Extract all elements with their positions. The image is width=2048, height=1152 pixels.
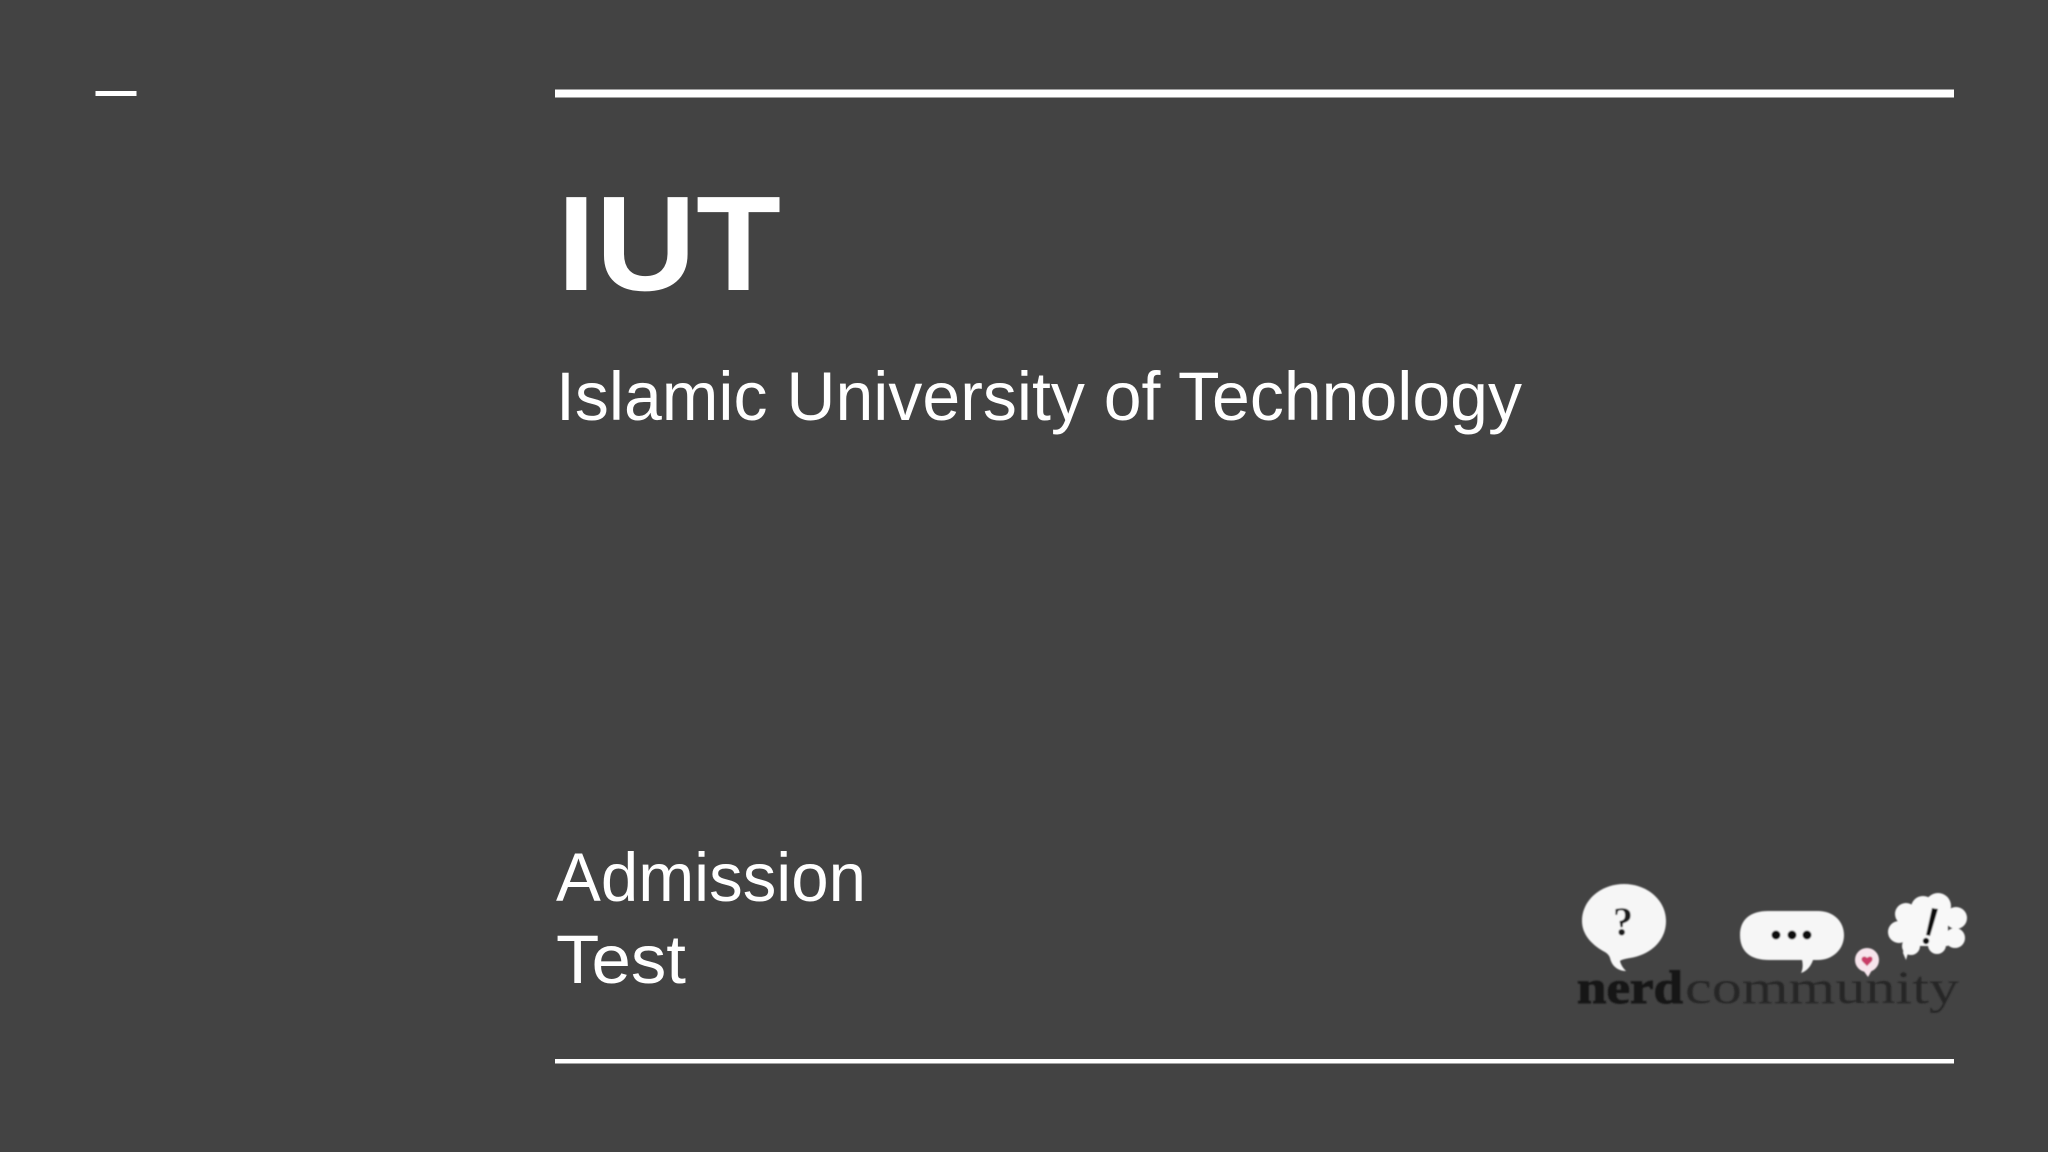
logo wordmark: community [1685, 962, 1960, 1014]
admission test label [556, 839, 866, 998]
subtitle: Islamic University of Technology [556, 358, 1522, 435]
logo: nerdcommunity [1577, 884, 1967, 1014]
bottom rule [555, 1059, 1954, 1064]
title: IUT [557, 168, 781, 319]
admission test label: Test [556, 921, 686, 998]
icon: ellipsis speech bubble [1740, 911, 1844, 973]
logo wordmark: nerd [1577, 962, 1683, 1014]
icon: question speech bubble: ? [1613, 899, 1633, 944]
icon: question speech bubble [1582, 884, 1666, 971]
logo wordmark [1577, 962, 1960, 1014]
icon: exclamation cloud bubble [1888, 893, 1967, 960]
small dash accent [96, 91, 136, 96]
icon: heart bubble [1855, 948, 1879, 977]
admission test label: Admission [556, 839, 866, 916]
top rule [555, 90, 1954, 98]
